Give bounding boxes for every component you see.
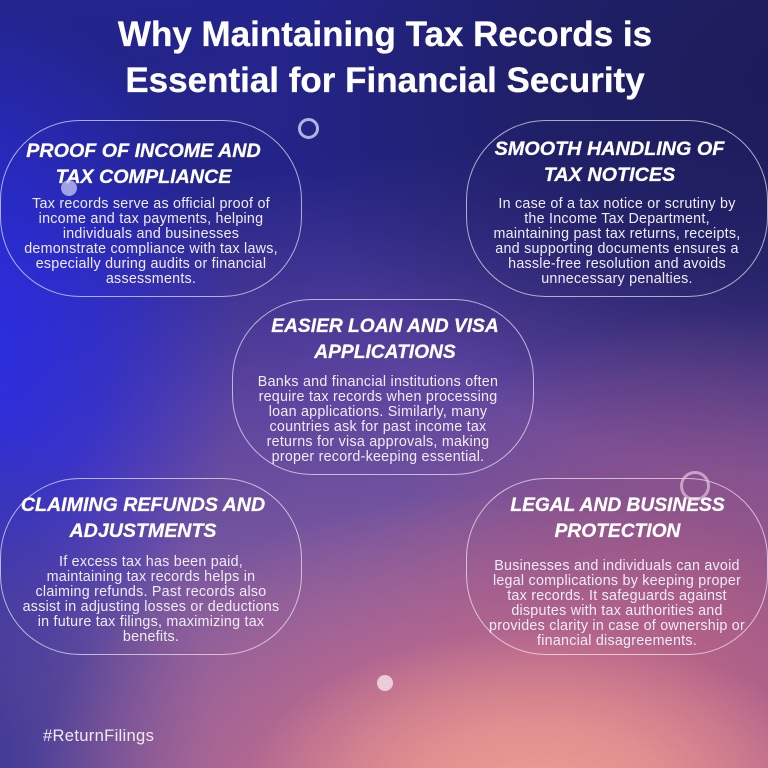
heading: loan and visa: EASIER LOAN AND VISA [271, 316, 499, 337]
text: tax notices: and supporting documents ensures a [495, 241, 739, 257]
text: claiming refunds: maintaining tax records helps in [47, 569, 255, 585]
panel: tax notices [466, 120, 768, 297]
decorative ring: top [298, 118, 319, 139]
text: tax notices: maintaining past tax returns, receipts, [494, 226, 740, 242]
text: claiming refunds [23, 554, 279, 645]
panel: proof of income [0, 120, 302, 297]
decorative dot: bottom [377, 675, 393, 691]
panel: legal protection [466, 478, 768, 655]
text: loan and visa: countries ask for past income tax [270, 419, 486, 435]
panel: claiming refunds [0, 478, 302, 655]
text: proof of income: Tax records serve as official proof of [32, 196, 270, 212]
text: loan and visa [258, 374, 498, 465]
text: proof of income: especially during audits or financial [36, 256, 266, 272]
heading: proof of income [26, 140, 261, 188]
hashtag: #ReturnFilings [43, 726, 154, 745]
title [118, 15, 652, 100]
text: tax notices: unnecessary penalties. [541, 271, 693, 287]
title: Essential for Financial Security [125, 61, 645, 100]
text: proof of income: individuals and businesses [63, 226, 239, 242]
heading: claiming refunds: CLAIMING REFUNDS AND [21, 494, 265, 516]
text: claiming refunds: benefits. [123, 629, 179, 645]
text: legal protection: Businesses and individuals can avoid [494, 558, 740, 574]
text: proof of income [24, 196, 278, 287]
text: loan and visa: require tax records when processing [259, 389, 497, 405]
heading: tax notices: SMOOTH HANDLING OF [495, 138, 724, 160]
text: legal protection: provides clarity in case of ownership or [489, 618, 745, 634]
heading: legal protection [510, 495, 725, 542]
text: proof of income: income and tax payments, helping [39, 211, 263, 227]
text: tax notices: In case of a tax notice or scrutiny by [498, 196, 736, 212]
heading: loan and visa [271, 316, 499, 363]
text: claiming refunds: assist in adjusting losses or deductions [23, 599, 279, 615]
text: legal protection: disputes with tax authorities and [511, 603, 723, 619]
text: legal protection [489, 558, 745, 649]
text: legal protection: tax records. It safeguards against [507, 588, 727, 604]
decorative ring: right [680, 471, 710, 501]
text: proof of income: assessments. [106, 271, 196, 287]
panel: loan and visa [232, 299, 534, 475]
text: loan and visa: returns for visa approvals, making [267, 434, 489, 450]
text: legal protection: financial disagreements. [537, 633, 697, 649]
text: tax notices [494, 196, 740, 287]
heading: legal protection: LEGAL AND BUSINESS [510, 495, 725, 516]
text: claiming refunds: claiming refunds. Past records also [36, 584, 266, 600]
heading: loan and visa: APPLICATIONS [314, 342, 456, 363]
text: tax notices: hassle-free resolution and avoids [508, 256, 726, 272]
decorative dot: left [61, 180, 77, 196]
text: legal protection: legal complications by keeping proper [493, 573, 741, 589]
text: proof of income: demonstrate compliance with tax laws, [24, 241, 278, 257]
heading: tax notices [494, 138, 725, 186]
text: loan and visa: Banks and financial institutions often [258, 374, 498, 390]
heading: claiming refunds [21, 494, 265, 542]
text: claiming refunds: in future tax filings, maximizing tax [38, 614, 264, 630]
heading: tax notices: TAX NOTICES [544, 164, 675, 186]
heading: legal protection: PROTECTION [555, 521, 680, 542]
title: Why Maintaining Tax Records is [118, 15, 652, 54]
heading: claiming refunds: ADJUSTMENTS [70, 520, 216, 542]
text: tax notices: the Income Tax Department, [524, 211, 710, 227]
text: claiming refunds: If excess tax has been paid, [59, 554, 243, 570]
text: loan and visa: loan applications. Similarly, many [269, 404, 487, 420]
heading: proof of income: TAX COMPLIANCE [56, 166, 231, 188]
heading: proof of income: PROOF OF INCOME AND [26, 140, 261, 162]
text: loan and visa: proper record-keeping essential. [272, 449, 484, 465]
